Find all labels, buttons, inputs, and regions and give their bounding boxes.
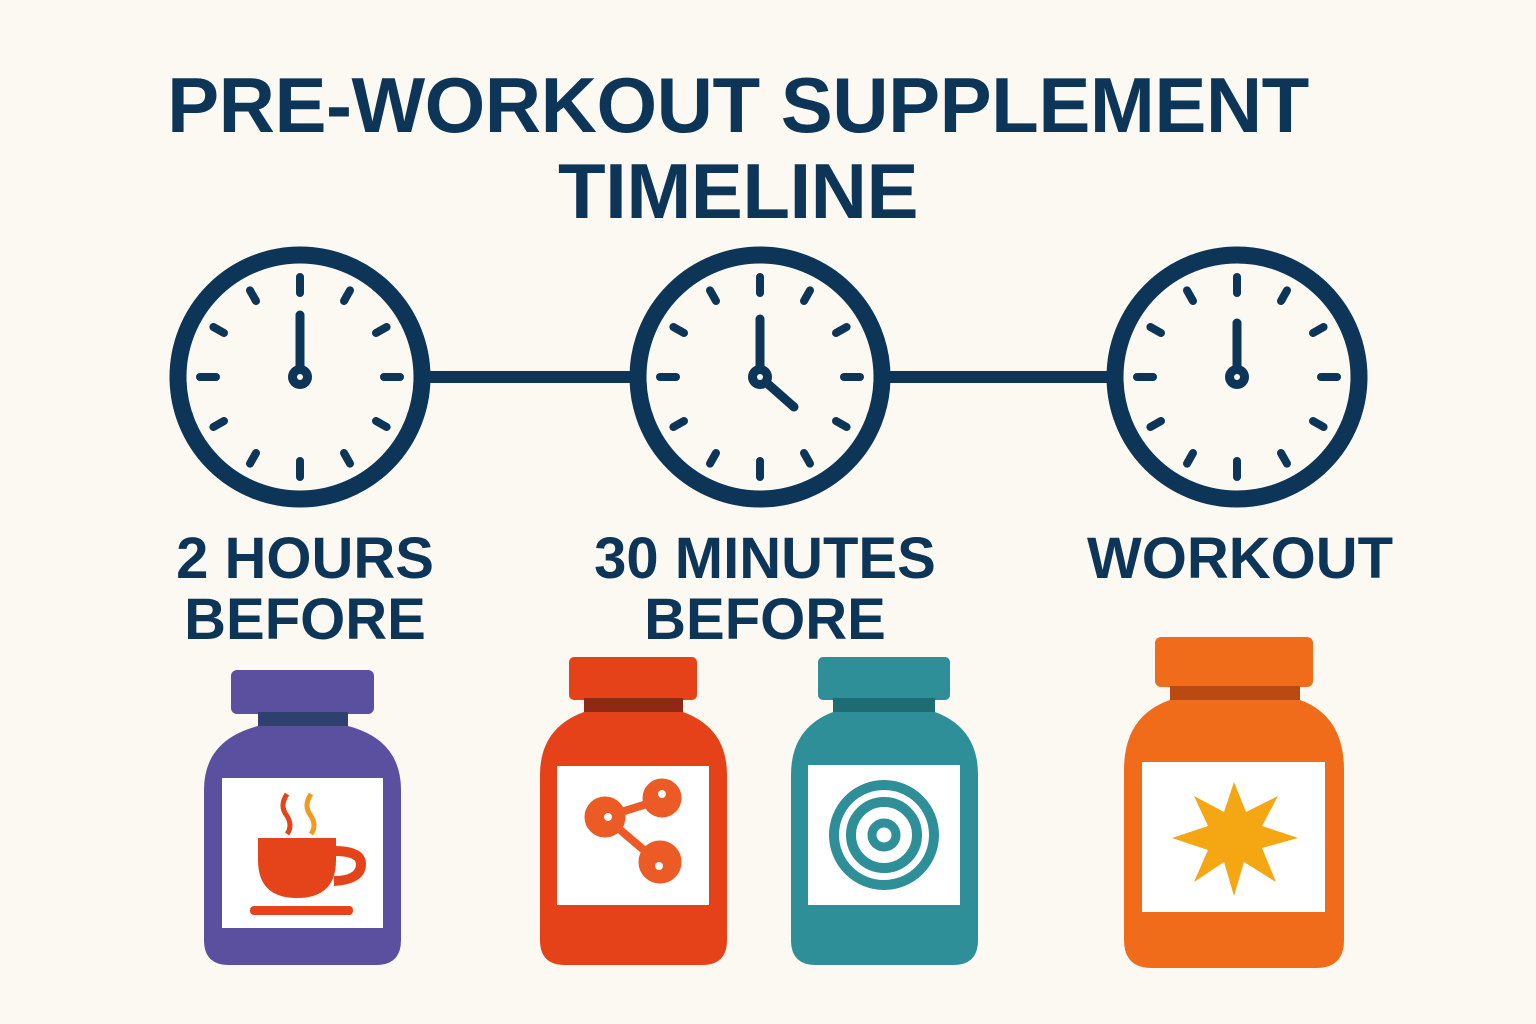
- icon: molecule: [585, 779, 681, 883]
- label: 30 minutes before: BEFORE: [644, 587, 886, 652]
- label: 2 hours before: BEFORE: [184, 587, 426, 652]
- clock 3: [1115, 255, 1359, 499]
- label: 30 minutes before: [594, 526, 936, 652]
- connector line: [420, 371, 1120, 383]
- label: 30 minutes before: 30 MINUTES: [594, 526, 936, 591]
- label: 2 hours before: [176, 526, 434, 652]
- icon: target: [834, 785, 934, 885]
- bottle 1 purple caffeine: [204, 670, 401, 965]
- label: 2 hours before: 2 HOURS: [176, 526, 434, 591]
- clock 2: [638, 255, 882, 499]
- title: PRE-WORKOUT SUPPLEMENT: [167, 61, 1309, 149]
- title: [167, 61, 1309, 235]
- bottle 4 orange energy: [1124, 637, 1344, 968]
- bottle 3 teal target: [791, 657, 978, 965]
- clock 1: [178, 255, 422, 499]
- label: workout: WORKOUT: [1087, 526, 1393, 591]
- bottle 2 red molecule: [540, 657, 727, 965]
- icon: starburst: [1172, 782, 1298, 896]
- icon: coffee cup: [250, 794, 366, 915]
- title: TIMELINE: [558, 147, 918, 235]
